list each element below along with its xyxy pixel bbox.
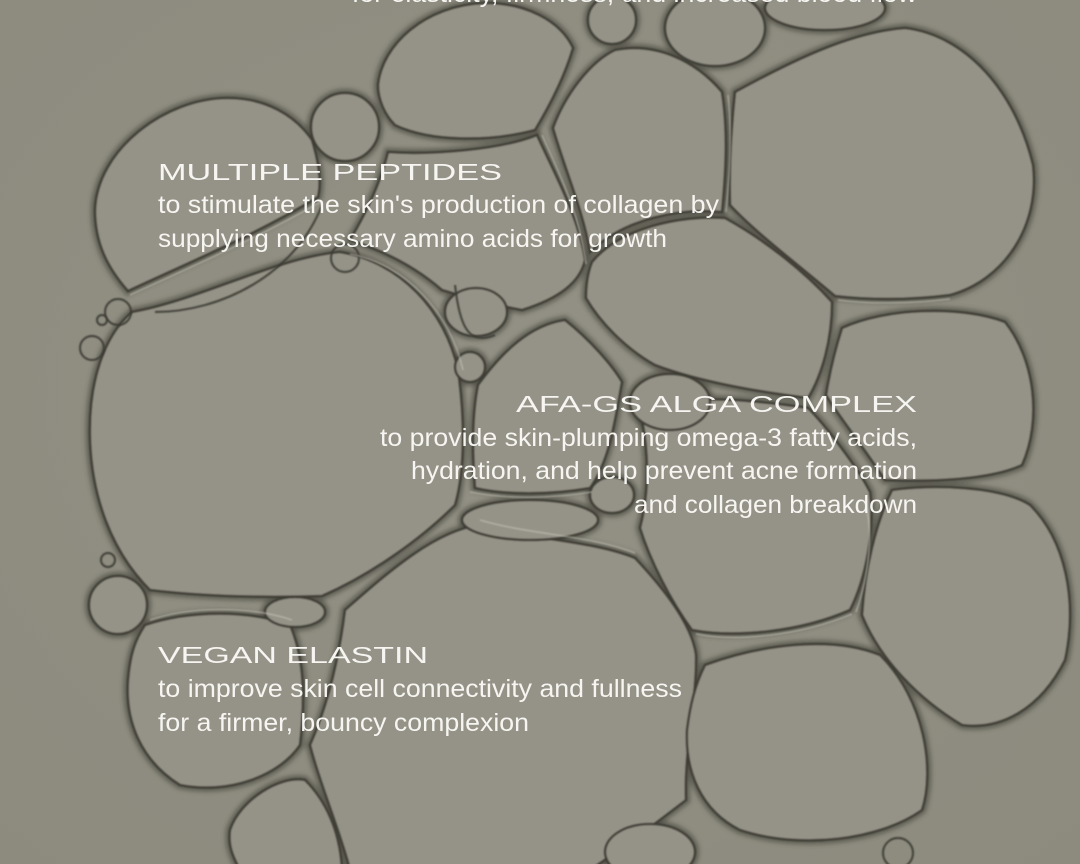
heading: vegan elastin: VEGAN ELASTIN — [158, 642, 428, 668]
description: AFA-GS alga complex: hydration, and help prevent acne formation — [411, 457, 917, 485]
description: AFA-GS alga complex: to provide skin-plumping omega-3 fatty acids, — [380, 424, 917, 452]
heading: AFA-GS alga complex: AFA-GS ALGA COMPLEX — [516, 391, 917, 417]
text block: multiple peptides — [158, 159, 720, 253]
heading: multiple peptides: MULTIPLE PEPTIDES — [158, 159, 502, 185]
text block: AFA-GS alga complex — [380, 391, 917, 519]
description: vegan elastin — [158, 675, 682, 737]
description: AFA-GS alga complex: and collagen breakdown — [634, 491, 917, 519]
bubble highlights — [130, 95, 950, 637]
description: multiple peptides: supplying necessary amino acids for growth — [158, 225, 667, 253]
description: multiple peptides: to stimulate the skin's production of collagen by — [158, 191, 720, 219]
description: vegan elastin: for a firmer, bouncy complexion — [158, 709, 529, 737]
description: multiple peptides — [158, 191, 720, 253]
description: AFA-GS alga complex — [380, 424, 917, 519]
text block: vegan elastin — [158, 642, 682, 737]
small bubbles — [80, 205, 913, 864]
description: vegan elastin: to improve skin cell connectivity and fullness — [158, 675, 682, 703]
